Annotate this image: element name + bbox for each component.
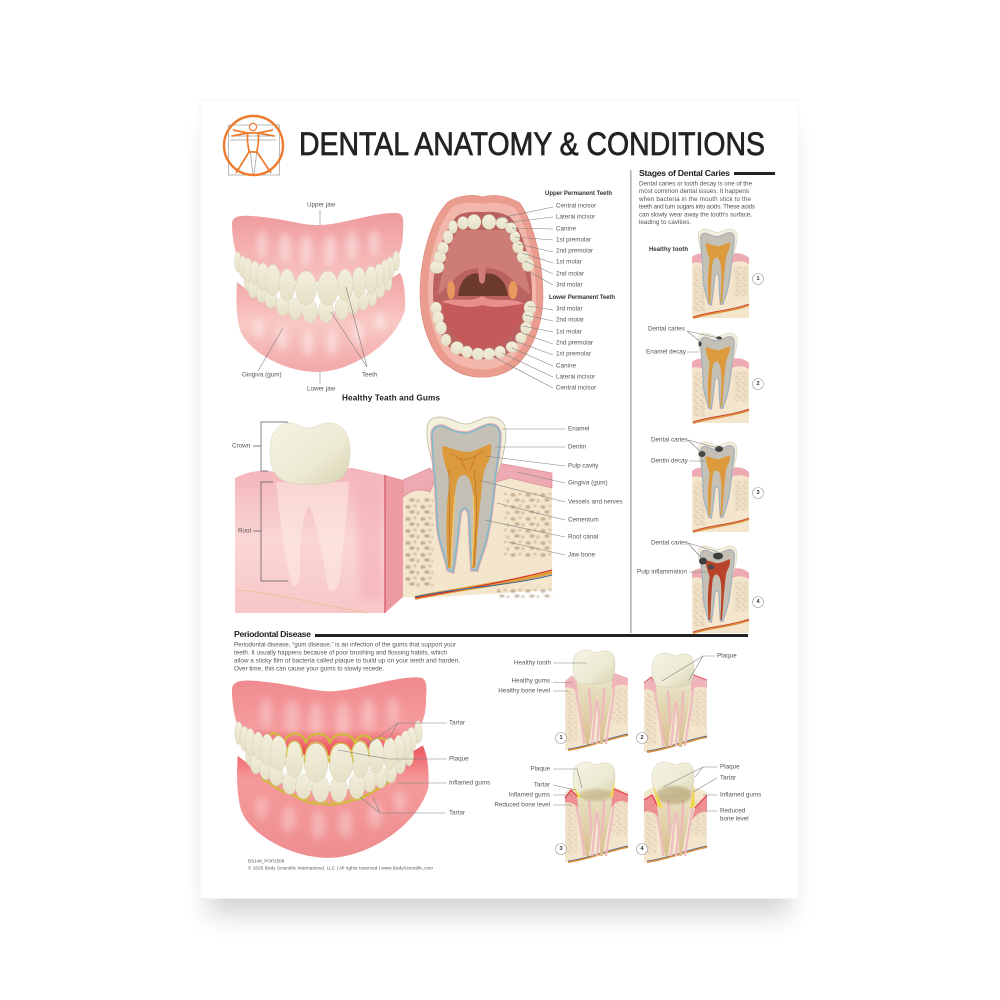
- upper teeth arch: [430, 214, 534, 274]
- panel: periodontal stage 1: 1: [559, 735, 563, 741]
- upper permanent teeth labels: Central incisor: [556, 202, 596, 210]
- jaw labels: [242, 202, 378, 392]
- tongue tip: [442, 296, 524, 307]
- periodontal intro text: teeth. It usually happens because of poor brushing and flossing habits, which: [234, 650, 447, 656]
- lower permanent teeth labels: 1st molar: [556, 328, 582, 336]
- poster sheet: [200, 100, 798, 898]
- section labels: Jaw bone: [568, 552, 595, 558]
- bone texture left: [405, 497, 433, 587]
- caries intro text: leading to cavities.: [639, 219, 691, 226]
- cut edge: [385, 475, 403, 613]
- inner lip: [428, 203, 536, 370]
- upper permanent teeth labels: 1st molar: [556, 258, 582, 266]
- caries intro text: [638, 180, 755, 226]
- panel: periodontal stage 4: bone level: [720, 816, 749, 822]
- section labels: Root canal: [568, 534, 598, 540]
- block labels: Root: [238, 528, 252, 534]
- panel: periodontal stage 3: Reduced bone level: [494, 802, 550, 808]
- disease labels: Plaque: [449, 756, 469, 762]
- caries intro text: Dental caries or tooth decay is one of the: [639, 180, 752, 188]
- caries stage 4: 4: [756, 599, 760, 605]
- caries intro text: most common dental issues. It happens: [639, 188, 749, 195]
- footer credits: © 2025 Body Scientific International, LLC | All rights reserved | www.BodyScientific.com: [248, 864, 433, 870]
- periodontal intro text: Periodontal disease, “gum disease,” is an infection of the gums that support your: [234, 642, 456, 648]
- title: DENTAL ANATOMY & CONDITIONS: [299, 126, 765, 162]
- heading: periodontal disease: Periodontal Disease: [234, 629, 311, 639]
- caries stage 4: Dental caries: [651, 540, 688, 546]
- caries heading: Stages of Dental Caries: [639, 168, 730, 178]
- bracket: root: [253, 482, 288, 581]
- vertical divider: [630, 170, 632, 633]
- jaw labels: Lower jaw: [307, 386, 336, 392]
- caries stage 1: 1: [756, 276, 760, 282]
- teeth: [234, 251, 400, 323]
- jaw labels: Gingiva (gum): [242, 372, 282, 378]
- panel: periodontal stage 1: Healthy gums: [512, 678, 550, 684]
- section labels: Dentin: [568, 444, 587, 450]
- panel: periodontal stage 4: 4: [640, 846, 644, 852]
- caries stage 2: Dental caries: [648, 326, 685, 332]
- caries stage 1: [649, 229, 764, 318]
- upper permanent teeth labels: 3rd molar: [556, 282, 583, 288]
- tartar and gum leader lines: [338, 723, 447, 813]
- disease labels: Tartar: [449, 810, 465, 816]
- section leader lines: [478, 429, 565, 555]
- caries stage 2: [646, 326, 764, 423]
- panel: periodontal stage 4: Plaque: [720, 764, 740, 770]
- disease labels: Inflamed gums: [449, 780, 490, 786]
- upper permanent teeth labels: Canine: [556, 226, 576, 232]
- gum block side shading: [355, 483, 383, 600]
- panel: inflamed jaw with tartar: [232, 677, 490, 858]
- panel: periodontal stage 4: Reduced: [720, 808, 746, 814]
- footer credits: [248, 858, 433, 870]
- inflamed upper gum: [232, 677, 426, 756]
- mouth leader lines: [492, 207, 553, 388]
- pulp vessels: [449, 450, 484, 566]
- pulp highlights: [451, 495, 474, 566]
- tooth cross section: [427, 417, 506, 572]
- blood vessels: [415, 570, 552, 598]
- block labels: Crown: [232, 442, 251, 450]
- lips: [420, 195, 543, 377]
- inflamed gum highlights: [256, 697, 406, 840]
- section labels: Pulp cavity: [568, 462, 599, 470]
- lower permanent teeth labels: 1st premolar: [556, 350, 591, 358]
- panel: stages of dental caries: [637, 168, 775, 633]
- caries stage 2: 2: [756, 381, 760, 387]
- section labels: Gingiva (gum): [568, 480, 608, 486]
- panel: open mouth view: [420, 191, 615, 392]
- caries stage 3: Dental caries: [651, 436, 688, 444]
- periodontal heading bar: [315, 634, 748, 637]
- panel: periodontal stage 2: Plaque: [717, 652, 737, 660]
- gingiva strips: [403, 463, 552, 497]
- gum highlights: [253, 230, 385, 356]
- panel: periodontal stage 3: 3: [559, 846, 563, 852]
- panel: periodontal stage 3: [494, 762, 628, 862]
- lower permanent teeth labels: 3rd molar: [556, 306, 583, 312]
- caries stage 4: [637, 540, 764, 633]
- caries stage 2: Enamel decay: [646, 348, 687, 356]
- upper permanent teeth labels: 1st premolar: [556, 236, 591, 244]
- upper permanent teeth labels: Lateral incisor: [556, 214, 595, 220]
- caries stage 3: [651, 436, 764, 532]
- throat: [458, 273, 508, 296]
- palate ridge: [480, 232, 484, 262]
- lower permanent teeth labels: Central incisor: [556, 384, 596, 392]
- panel: periodontal stage 4: Inflamed gums: [720, 792, 761, 798]
- caries stage 1: Healthy tooth: [649, 247, 688, 253]
- logo: Vitruvian figure: [224, 116, 283, 175]
- gum block: [235, 468, 385, 613]
- tonsils: [447, 281, 518, 299]
- upper gum: [232, 213, 403, 282]
- panel: healthy jaw front view: [232, 202, 405, 392]
- inflamed lower gum: [237, 746, 429, 858]
- tartar margins: [286, 741, 369, 803]
- section labels: Enamel: [568, 426, 589, 432]
- upper permanent teeth labels: 2nd molar: [556, 270, 584, 278]
- lower permanent teeth labels: 2nd premolar: [556, 340, 593, 346]
- upper permanent teeth labels: 2nd premolar: [556, 248, 593, 254]
- bone texture bottom: [497, 586, 552, 598]
- tartar line upper: [266, 733, 389, 744]
- panel: periodontal stage 3: Plaque: [530, 766, 550, 772]
- jaw labels: Teeth: [362, 372, 378, 378]
- panel: periodontal stage 1: [498, 650, 628, 750]
- periodontal intro text: Over time, this can cause your gums to slowly recede.: [234, 666, 384, 672]
- lower permanent teeth labels: [549, 295, 615, 392]
- panel: periodontal stage 2: 2: [640, 735, 644, 741]
- caries stage 4: Pulp inflammation: [637, 568, 688, 576]
- panel: periodontal stage 3: Inflamed gums: [509, 792, 550, 798]
- caries intro text: when bacteria in the mouth stick to the: [638, 196, 751, 203]
- root ghost: [276, 482, 349, 591]
- upper permanent teeth labels: [545, 191, 612, 288]
- caries intro text: teeth and turn sugars into acids. These acids: [639, 204, 755, 210]
- lower permanent teeth labels: Lower Permanent Teeth: [549, 295, 615, 301]
- diseased teeth: [235, 721, 422, 802]
- lower permanent teeth labels: Lateral incisor: [556, 374, 595, 380]
- section labels: [568, 426, 623, 558]
- periodontal intro text: [234, 642, 460, 672]
- tartar line lower: [262, 778, 391, 805]
- bone texture right: [504, 492, 551, 558]
- bracket: crown: [253, 422, 288, 471]
- palate: [438, 230, 530, 295]
- panel: molar in gum block: [232, 417, 623, 613]
- panel: periodontal stage 1: Healthy tooth: [514, 660, 551, 666]
- caries intro text: can slowly wear away the tooth's surface,: [639, 212, 752, 218]
- bone block: [403, 466, 552, 598]
- upper permanent teeth labels: Upper Permanent Teeth: [545, 191, 612, 197]
- section labels: Cementum: [568, 516, 599, 524]
- panel: periodontal stage 3: Tartar: [534, 782, 550, 788]
- caries stage 3: 3: [756, 490, 760, 496]
- uvula: [478, 265, 486, 284]
- poster shadow: [208, 130, 790, 915]
- crown: [270, 423, 350, 485]
- heading: healthy teeth and gums: Healthy Teath and Gums: [342, 394, 440, 402]
- section labels: Vessels and nerves: [568, 498, 623, 506]
- oral cavity: [433, 212, 532, 359]
- jaw leader lines: [258, 210, 367, 384]
- disease labels: [449, 720, 490, 816]
- periodontal intro text: allow a sticky film of bacteria called plaque to build up on your teeth and harden.: [234, 658, 460, 664]
- lower gum: [236, 273, 405, 372]
- footer credits: BS148_POP2508: [248, 858, 285, 864]
- panel: periodontal stage 4: [636, 762, 761, 862]
- caries heading bar: [734, 172, 775, 175]
- panel: periodontal stage 4: Tartar: [720, 774, 736, 782]
- panel: periodontal stage 1: Healthy bone level: [498, 688, 550, 694]
- lower permanent teeth labels: 2nd molar: [556, 316, 584, 324]
- panel: periodontal stage 2: [636, 652, 737, 752]
- disease labels: Tartar: [449, 720, 465, 726]
- jaw labels: Upper jaw: [307, 202, 336, 208]
- caries stage 3: Dentin decay: [651, 458, 689, 464]
- lower teeth arch: [430, 301, 536, 360]
- nerve line: [236, 590, 368, 613]
- lower permanent teeth labels: Canine: [556, 362, 576, 370]
- block labels: [232, 442, 252, 534]
- tongue: [442, 296, 524, 349]
- cut edge rim: [384, 475, 386, 613]
